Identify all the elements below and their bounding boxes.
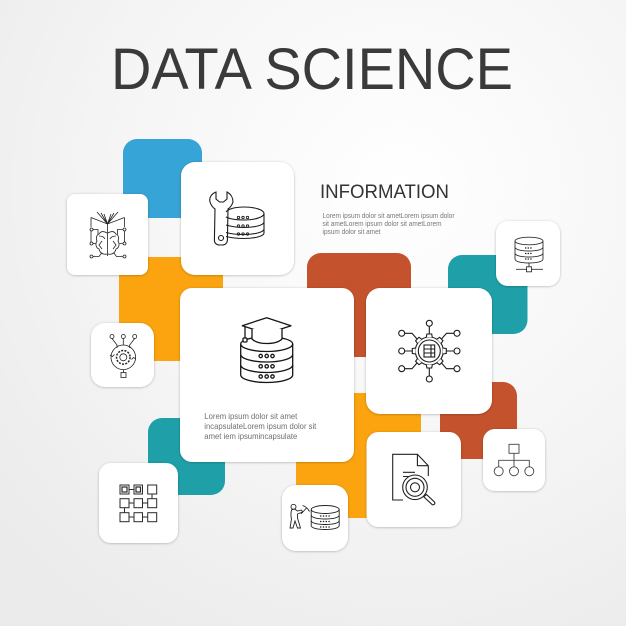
panel: brain book [67,194,148,275]
icon: wrench and database [210,192,264,245]
text block: main card body: amet iem ipsumincapsulate [204,431,298,441]
text block: information body [322,211,455,236]
text block: main card body [204,411,317,441]
panel: data hub [366,288,492,414]
tile: teal left [148,418,225,495]
icon: gear with connected nodes [399,320,460,382]
panel: hierarchy [483,429,545,491]
tile: blue [123,139,202,218]
tile: red centre [307,253,411,357]
panel: block diagram [99,463,178,543]
icon: document with magnifier [393,454,435,505]
icon: server on network [515,237,543,272]
icon: gear in circle with inputs [110,334,137,378]
heading: information: INFORMATION [320,181,449,203]
tile: red right [440,382,517,459]
icon: miner and database [290,504,339,530]
panel: network server [496,221,560,286]
tile: orange centre [296,393,421,518]
tile: orange left [119,257,223,361]
text block: information body: Lorem ipsum dolor sit ametLorem ipsum dolor [322,211,455,220]
text block: main card body: incapsulateLorem ipsum dolor sit [204,421,317,431]
panel: document search [366,432,461,527]
panel: main card [180,288,354,462]
icon: database with graduation cap [241,318,293,382]
text block: main card body: Lorem ipsum dolor sit amet [204,411,298,421]
title: DATA SCIENCE [111,37,513,102]
text block: information body: ipsum dolor sit amet [322,227,380,236]
icon: brain and open book [90,212,126,258]
panel: data mining [282,485,348,551]
text block: information body: sit ametLorem ipsum dolor sit ametLorem [322,219,442,228]
panel: gear process [91,323,154,387]
tile: teal right [448,255,528,334]
icon: tree hierarchy [494,444,534,476]
coloured backing tiles [119,139,528,518]
icon: connected blocks [120,485,157,522]
panel: wrench database [181,162,294,275]
